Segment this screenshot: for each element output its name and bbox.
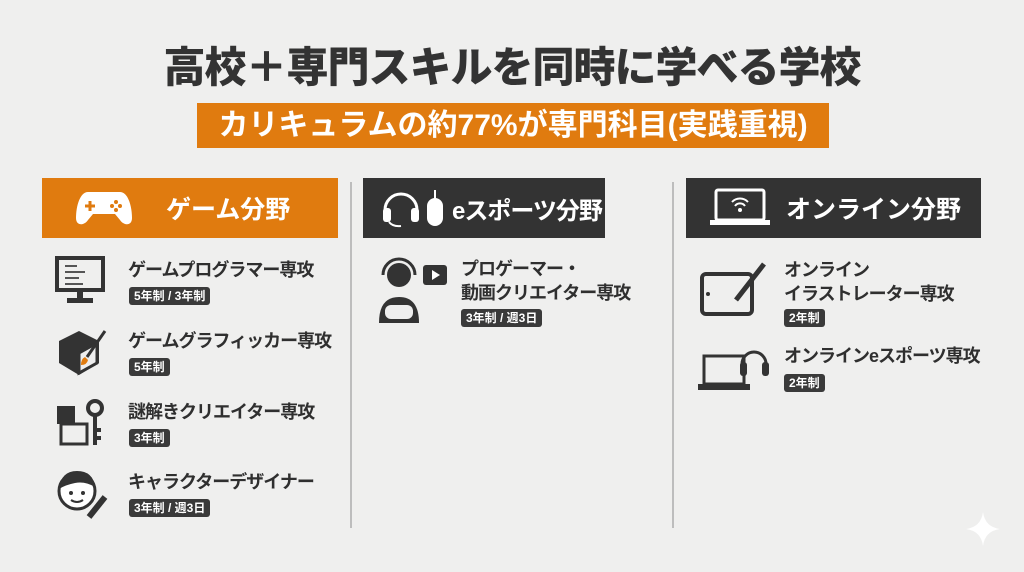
item: online esports: 2年制 [789,376,820,390]
item: online illustrator: 2年制 [789,311,820,325]
item: game graphic [59,330,332,376]
header: game [42,178,338,238]
header: esports: eスポーツ分野 [452,198,602,224]
title: 高校＋専門スキルを同時に学べる学校 [163,44,860,91]
item: pro gamer: 動画クリエイター専攻 [461,283,630,303]
icon: laptop headset [698,350,769,390]
header: online: オンライン分野 [786,196,961,224]
icon: gamer with play [379,258,447,323]
icon: laptop wifi [710,188,770,225]
item: character designer [58,471,314,519]
item: character designer: 3年制 / 週3日 [134,501,205,515]
icon: gamepad [76,192,132,224]
item: game programmer: ゲームプログラマー専攻 [128,260,313,280]
icon: tablet pen [700,262,766,316]
header: esports [363,178,605,238]
subtitle banner [197,103,829,148]
item: character designer: キャラクターデザイナー [128,472,314,492]
icon: puzzle key [57,399,104,446]
item: game programmer: 5年制 / 3年制 [134,289,205,303]
item: pro gamer [379,258,631,327]
icon: monitor [55,256,105,303]
item: game graphic: 5年制 [134,360,165,374]
header: online [686,178,981,238]
item: online esports [698,346,980,392]
item: game programmer [55,256,314,305]
item: online illustrator [700,260,954,327]
icon: headset and mouse [383,190,443,228]
item: escape creator: 3年制 [134,431,165,445]
item: pro gamer: プロゲーマー・ [461,259,580,279]
icon: cube with brush [59,330,106,376]
item: online illustrator: オンライン [784,260,869,280]
icon: face with pen [58,471,108,519]
header: game: ゲーム分野 [166,196,290,224]
subtitle banner: カリキュラムの約77%が専門科目(実践重視) [218,109,808,142]
item: escape creator: 謎解きクリエイター専攻 [128,402,314,422]
item: online esports: オンラインeスポーツ専攻 [784,346,980,366]
item: pro gamer: 3年制 / 週3日 [466,311,537,325]
item: game graphic: ゲームグラフィッカー専攻 [128,331,331,351]
item: escape creator [57,399,315,447]
icon: sparkle [967,514,999,544]
item: online illustrator: イラストレーター専攻 [784,284,954,304]
